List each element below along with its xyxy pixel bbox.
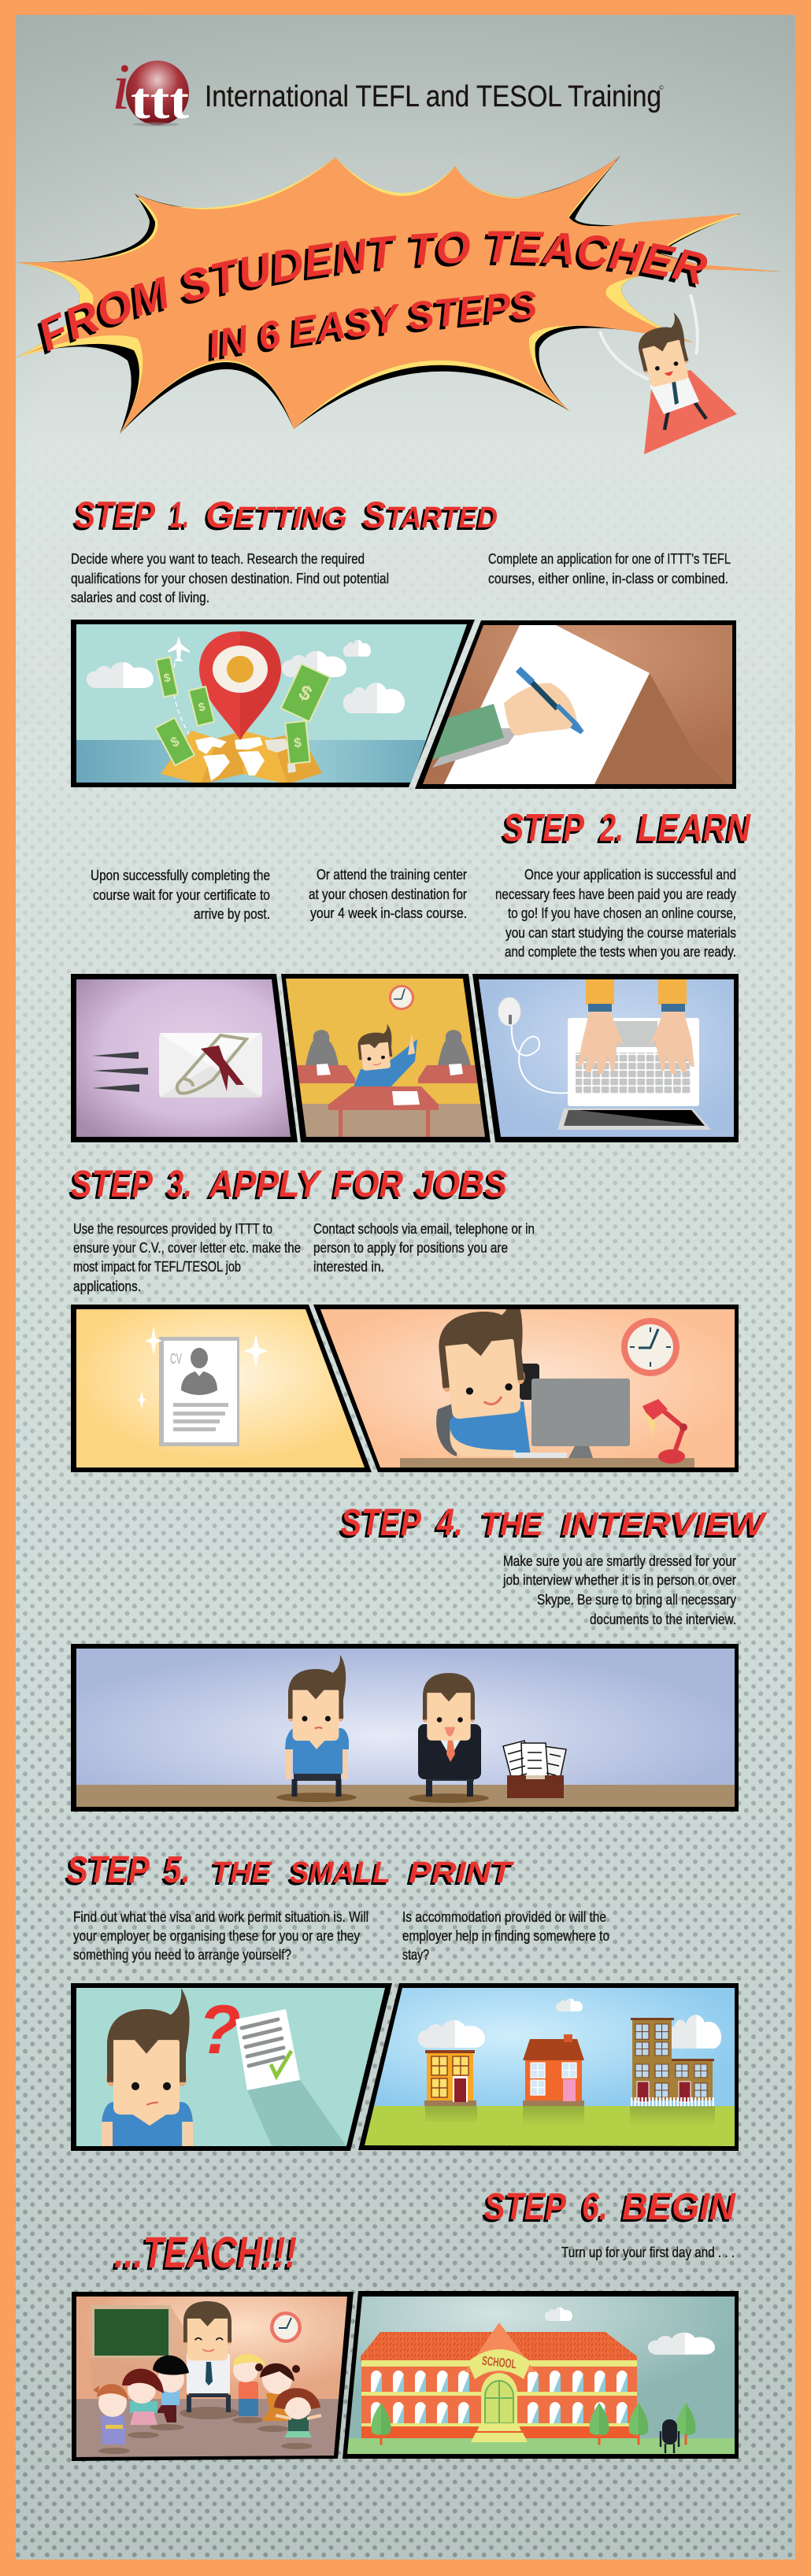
neck <box>126 2110 173 2126</box>
floor <box>302 1104 485 1137</box>
step 3 heading: FOR <box>333 1164 403 1205</box>
step 2 text column 2: your 4 week in-class course. <box>310 905 467 921</box>
cloud right <box>648 2333 715 2355</box>
desk <box>400 1458 694 1469</box>
title line one: FROM STUDENT TO TEACHER <box>38 231 707 354</box>
panel: accommodation <box>358 1983 739 2151</box>
legs <box>665 398 706 430</box>
wall clock <box>270 2311 302 2343</box>
child buns <box>255 2363 300 2432</box>
child bob hair <box>274 2388 321 2449</box>
CV sheet: CV <box>170 1351 182 1367</box>
panel: interview <box>71 1644 739 1812</box>
silhouette left <box>306 1030 339 1065</box>
teacher <box>180 2301 239 2419</box>
keyboard <box>513 1453 567 1458</box>
step 1 text left: Decide where you want to teach. Research the required <box>71 550 365 567</box>
sleeve <box>432 704 504 760</box>
desk lamp <box>643 1399 687 1464</box>
cloud middle <box>282 651 346 677</box>
step 2 text column 1: course wait for your certificate to <box>93 886 270 903</box>
shirt <box>450 1401 531 1456</box>
step 2 heading <box>503 807 751 849</box>
step 5 heading: SMALL <box>290 1856 391 1889</box>
flight trail <box>173 663 189 735</box>
child glasses purple dress <box>93 2384 130 2454</box>
picket fence <box>629 2097 716 2107</box>
laptop base <box>557 1108 711 1130</box>
floor <box>76 1785 735 1807</box>
step 5 heading: PRINT <box>409 1856 514 1889</box>
panel: CV <box>71 1305 372 1472</box>
brown apartment block <box>631 2018 714 2102</box>
logo wordmark: International TEFL and TESOL Training <box>205 80 661 113</box>
step 3 heading <box>71 1164 507 1205</box>
student head <box>356 1023 395 1071</box>
step 2 text column 1: Upon successfully completing the <box>91 867 270 883</box>
step 5 text column 1: Find out what the visa and work permit situation is. Will <box>73 1908 368 1925</box>
step 3 text column 1: ensure your C.V., cover letter etc. make the <box>73 1239 301 1256</box>
wall clock <box>621 1318 680 1376</box>
panel: certificate by post <box>71 974 298 1142</box>
CV sheet <box>159 1337 239 1446</box>
step 5 text column 2: stay? <box>402 1946 429 1963</box>
cape <box>644 370 737 454</box>
shirt <box>650 373 699 414</box>
chair <box>436 1401 458 1456</box>
panel: classroom student <box>281 974 491 1142</box>
paper shadow <box>607 673 691 761</box>
step 1 text left <box>71 550 389 605</box>
school building <box>361 2322 637 2442</box>
burst orange <box>16 156 781 434</box>
step 2 text column 1: arrive by post. <box>194 905 270 922</box>
question mark: ? <box>198 1990 241 2068</box>
step 5 text column 2 <box>402 1908 609 1963</box>
step 4 heading: INTERVIEW <box>561 1505 768 1542</box>
step 2 text column 2: at your chosen destination for <box>309 886 467 902</box>
panel: online study <box>472 974 739 1142</box>
child glasses black hair <box>150 2356 189 2430</box>
pen <box>518 669 582 732</box>
step 3 text column 1: most impact for TEFL/TESOL job <box>73 1258 241 1275</box>
step 1 heading: STEP <box>75 494 156 535</box>
steps <box>471 2423 528 2442</box>
wall clock <box>389 985 414 1010</box>
step 1 heading: 1. <box>170 494 189 535</box>
keyboard <box>576 1053 691 1094</box>
shirt <box>102 2102 193 2146</box>
candidate <box>285 1655 349 1797</box>
step 2 text column 3 <box>495 866 737 960</box>
silhouette right <box>438 1030 471 1065</box>
entrance <box>481 2373 517 2423</box>
copyright mark: © <box>659 84 664 91</box>
step 4 text: Make sure you are smartly dressed for your <box>503 1553 736 1569</box>
panel: visa question <box>71 1983 392 2151</box>
step 3 heading: 3. <box>167 1164 192 1205</box>
exam paper <box>392 1091 420 1105</box>
step 5 heading <box>67 1849 514 1891</box>
trees <box>372 2403 695 2445</box>
step 3 text column 2: interested in. <box>313 1258 384 1275</box>
step 3 text column 2 <box>313 1220 535 1275</box>
yellow house <box>424 2050 476 2106</box>
cloud left <box>87 662 154 688</box>
step 1 text right: Complete an application for one of ITTT's TEFL <box>488 550 731 567</box>
step 4 heading <box>341 1502 768 1544</box>
raised hand <box>408 1033 415 1055</box>
logo shadow <box>132 123 180 126</box>
laptop body <box>568 1018 699 1106</box>
interviewer shadow <box>409 1793 489 1803</box>
interviewer <box>418 1673 481 1797</box>
step 2 text column 2 <box>309 866 467 921</box>
step 2 text column 3: necessary fees have been paid you are ready <box>495 886 737 902</box>
money bills <box>155 657 330 765</box>
step 2 text column 3: you can start studying the course materials <box>505 924 736 941</box>
step 3 text column 2: Contact schools via email, telephone or in <box>313 1220 535 1237</box>
desk papers <box>317 1064 463 1075</box>
folded map <box>161 731 322 784</box>
cloud left <box>418 2020 485 2048</box>
cloud small <box>545 2308 572 2321</box>
step 4 text: documents to the interview. <box>590 1611 736 1627</box>
step 5 heading: THE <box>212 1856 273 1889</box>
title burst <box>16 156 781 434</box>
document shadow <box>247 2080 346 2146</box>
panel: school <box>343 2291 739 2459</box>
step 1 text right: courses, either online, in-class or combined. <box>488 570 728 587</box>
student body <box>352 1039 417 1090</box>
logo <box>112 50 664 130</box>
step 3 text column 1: applications. <box>73 1278 141 1294</box>
cloud right <box>666 2015 721 2049</box>
step 4 text <box>502 1553 737 1627</box>
step 1 text right <box>488 550 731 587</box>
head <box>432 1286 531 1420</box>
raised arms <box>600 294 698 379</box>
teach heading: ...TEACH!!! <box>114 2227 297 2277</box>
title text <box>38 231 707 361</box>
money bills: $ <box>293 735 302 750</box>
step 3 heading: JOBS <box>415 1164 507 1205</box>
step 5 text column 1: something you need to arrange yourself? <box>73 1946 291 1963</box>
step 1 text left: salaries and cost of living. <box>71 589 209 605</box>
title line two: IN 6 EASY STEPS <box>208 291 536 361</box>
step 3 text column 2: person to apply for positions you are <box>313 1239 508 1256</box>
icon: flying superhero <box>600 294 737 454</box>
head <box>631 311 694 389</box>
panel: map and destination <box>71 620 475 787</box>
step 4 heading: STEP <box>341 1502 422 1544</box>
ribbon <box>201 1046 244 1091</box>
step 2 text column 1 <box>91 867 270 922</box>
right hand <box>649 979 694 1074</box>
step 4 text: Skype. Be sure to bring all necessary <box>537 1591 737 1608</box>
rolled diploma <box>177 1035 246 1094</box>
sparkles <box>137 1327 268 1409</box>
money bills: $ <box>197 700 207 715</box>
step 5 heading: STEP <box>67 1849 150 1891</box>
orange house <box>523 2034 584 2106</box>
monitor <box>531 1379 630 1458</box>
step 6 text: Turn up for your first day and . . . <box>561 2244 735 2260</box>
arm <box>450 1429 516 1456</box>
burst yellow layer <box>16 157 781 434</box>
cloud small <box>556 1998 583 2012</box>
step 5 text column 2: employer help in finding somewhere to <box>402 1927 609 1944</box>
step 6 heading: STEP <box>484 2186 567 2228</box>
panel: filling in application <box>415 620 736 789</box>
step 2 text column 3: and complete the tests when you are ready. <box>505 943 736 960</box>
step 5 text column 1: your employer be organising these for you or are they <box>73 1927 361 1944</box>
step 3 text column 1: Use the resources provided by ITTT to <box>73 1220 272 1237</box>
plane <box>168 636 190 661</box>
step 2 text column 2: Or attend the training center <box>317 866 467 883</box>
pediment <box>465 2322 535 2372</box>
step 1 heading <box>75 494 498 535</box>
panel: applying by phone and computer <box>313 1286 739 1472</box>
logo letters ttt: ttt <box>131 72 189 130</box>
step 3 text column 1 <box>73 1220 301 1294</box>
step 2 heading: 2. <box>599 807 624 849</box>
candidate shadow <box>276 1793 357 1802</box>
sign <box>468 2349 531 2379</box>
head <box>106 1988 190 2115</box>
school building: SCHOOL <box>481 2355 517 2371</box>
step 5 heading: 5. <box>164 1849 191 1891</box>
sea <box>76 740 426 783</box>
step 5 text column 1 <box>73 1908 368 1963</box>
tie <box>672 381 679 405</box>
house reflections <box>425 2106 715 2126</box>
mouse and cable <box>498 997 568 1093</box>
grass <box>346 2438 735 2454</box>
upper windows <box>371 2371 628 2392</box>
floor <box>76 2399 348 2458</box>
small figure <box>661 2419 679 2453</box>
step 4 heading: THE <box>481 1505 545 1542</box>
step 1 heading: STARTED <box>363 494 498 535</box>
desk <box>328 1086 439 1137</box>
step 2 text column 3: Once your application is successful and <box>524 866 736 883</box>
checklist document <box>235 2009 300 2090</box>
step 3 heading: STEP <box>71 1164 154 1205</box>
step 1 heading: GETTING <box>206 494 347 535</box>
step 3 heading: APPLY <box>209 1164 323 1205</box>
step 2 heading: STEP <box>503 807 584 849</box>
burst shadow <box>16 156 781 434</box>
sleeve shadow <box>432 728 520 768</box>
paper <box>444 625 650 784</box>
step 1 text left: qualifications for your chosen destination. Find out potential <box>71 570 389 587</box>
hand <box>504 683 577 735</box>
side desks <box>298 1065 477 1083</box>
step 4 heading: 4. <box>436 1502 463 1544</box>
trackpad and speaker <box>602 1021 657 1047</box>
money bills: $ <box>295 679 316 706</box>
money bills: $ <box>162 671 172 686</box>
child blonde <box>232 2354 266 2423</box>
step 6 heading: 6. <box>582 2186 608 2228</box>
blackboard <box>91 2305 189 2389</box>
step 5 text column 2: Is accommodation provided or will the <box>402 1908 606 1925</box>
left hand <box>577 979 624 1074</box>
step 2 heading: LEARN <box>638 807 751 849</box>
cloud small <box>343 640 371 657</box>
speed lines <box>92 1052 148 1092</box>
phone <box>520 1364 539 1400</box>
money bills: $ <box>168 734 182 750</box>
panel: classroom with children <box>72 2292 354 2461</box>
lower windows <box>371 2402 628 2423</box>
logo ball <box>126 61 189 125</box>
envelope <box>159 1033 262 1097</box>
step 2 text column 3: to go! If you have chosen an online course, <box>508 905 736 921</box>
child auburn hair <box>122 2369 164 2438</box>
grass <box>362 2106 735 2147</box>
arms <box>102 2118 193 2146</box>
laptop screen <box>564 1110 705 1126</box>
documents box <box>503 1741 566 1798</box>
cloud right <box>343 683 405 713</box>
logo letter i: i <box>112 50 130 124</box>
location pin <box>199 631 281 740</box>
step 4 text: job interview whether it is in person or over <box>502 1571 736 1588</box>
step 6 heading: BEGIN <box>622 2186 736 2228</box>
step 6 heading <box>484 2186 736 2228</box>
